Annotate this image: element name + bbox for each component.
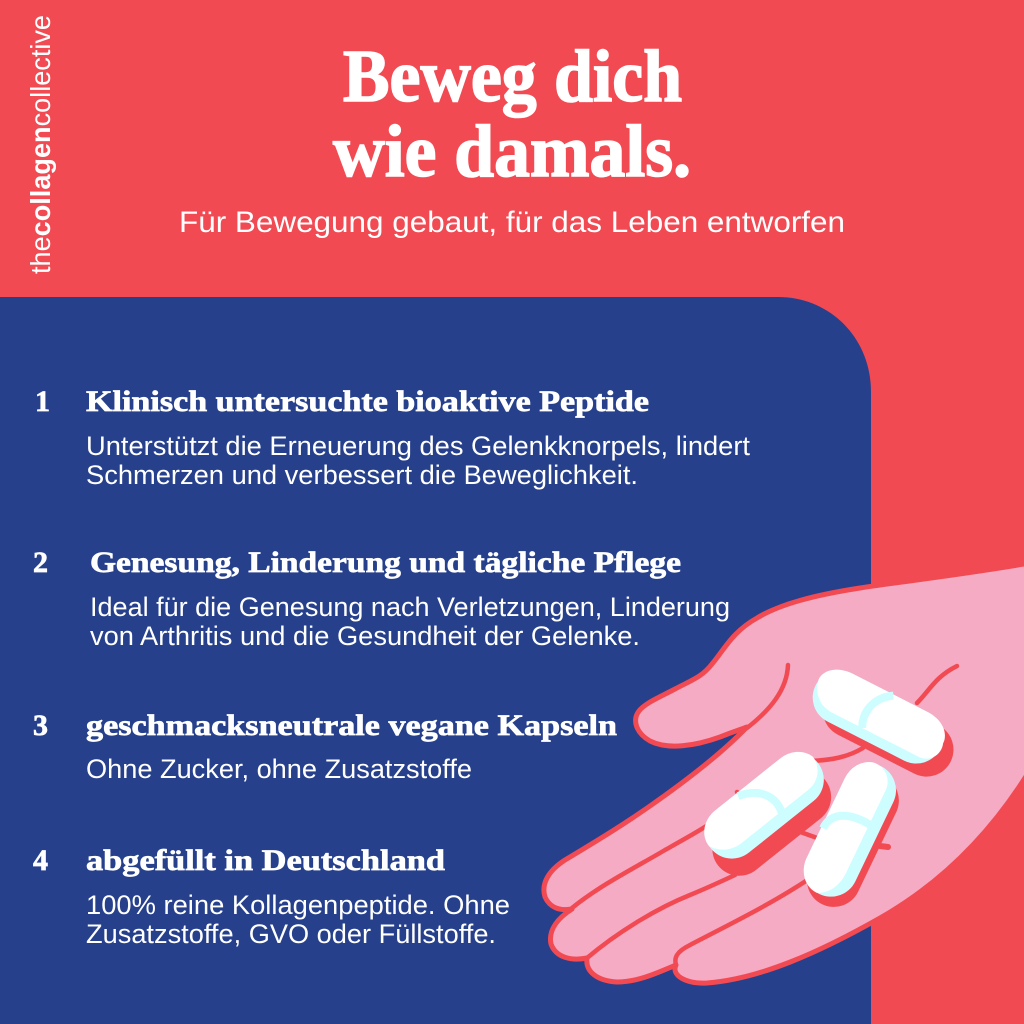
benefit 3 xyxy=(33,709,617,784)
hand shape xyxy=(544,563,1024,983)
subtitle: Für Bewegung gebaut, für das Leben entworfen xyxy=(179,206,845,239)
benefit 4 xyxy=(33,844,510,949)
benefit 2: Ideal für die Genesung nach Verletzungen, Linderung xyxy=(90,592,730,622)
benefit 4: Zusatzstoffe, GVO oder Füllstoffe. xyxy=(86,919,496,949)
capsule 3 xyxy=(792,754,911,916)
capsule 1 xyxy=(800,661,966,786)
title: wie damals. xyxy=(333,111,691,193)
vertical brand logo: thecollagencollective xyxy=(25,15,56,274)
benefit 1: 1 xyxy=(35,385,50,418)
benefit 4: 100% reine Kollagenpeptide. Ohne xyxy=(86,890,510,920)
title: Beweg dich xyxy=(343,36,682,118)
benefit 2: 2 xyxy=(33,546,48,579)
illustration: hand holding capsules xyxy=(544,563,1024,983)
capsule 2 xyxy=(690,742,846,887)
benefit 3: Ohne Zucker, ohne Zusatzstoffe xyxy=(86,754,472,784)
benefit 3: 3 xyxy=(33,709,48,742)
title xyxy=(333,36,691,193)
benefit 1: Unterstützt die Erneuerung des Gelenkknorpels, lindert xyxy=(86,431,750,461)
benefit 1: Klinisch untersuchte bioaktive Peptide xyxy=(86,385,649,418)
benefit 1: Schmerzen und verbessert die Beweglichkeit. xyxy=(86,460,638,490)
benefit 2: von Arthritis und die Gesundheit der Gelenke. xyxy=(90,621,640,651)
benefit 4: abgefüllt in Deutschland xyxy=(86,844,445,877)
benefit 2 xyxy=(33,546,730,651)
benefit 1 xyxy=(35,385,750,490)
benefit 4: 4 xyxy=(33,844,48,877)
panel: blue benefits background xyxy=(0,297,871,1024)
palm and finger lines xyxy=(572,665,957,965)
benefit 2: Genesung, Linderung und tägliche Pflege xyxy=(90,546,681,579)
benefit 3: geschmacksneutrale vegane Kapseln xyxy=(86,709,617,742)
